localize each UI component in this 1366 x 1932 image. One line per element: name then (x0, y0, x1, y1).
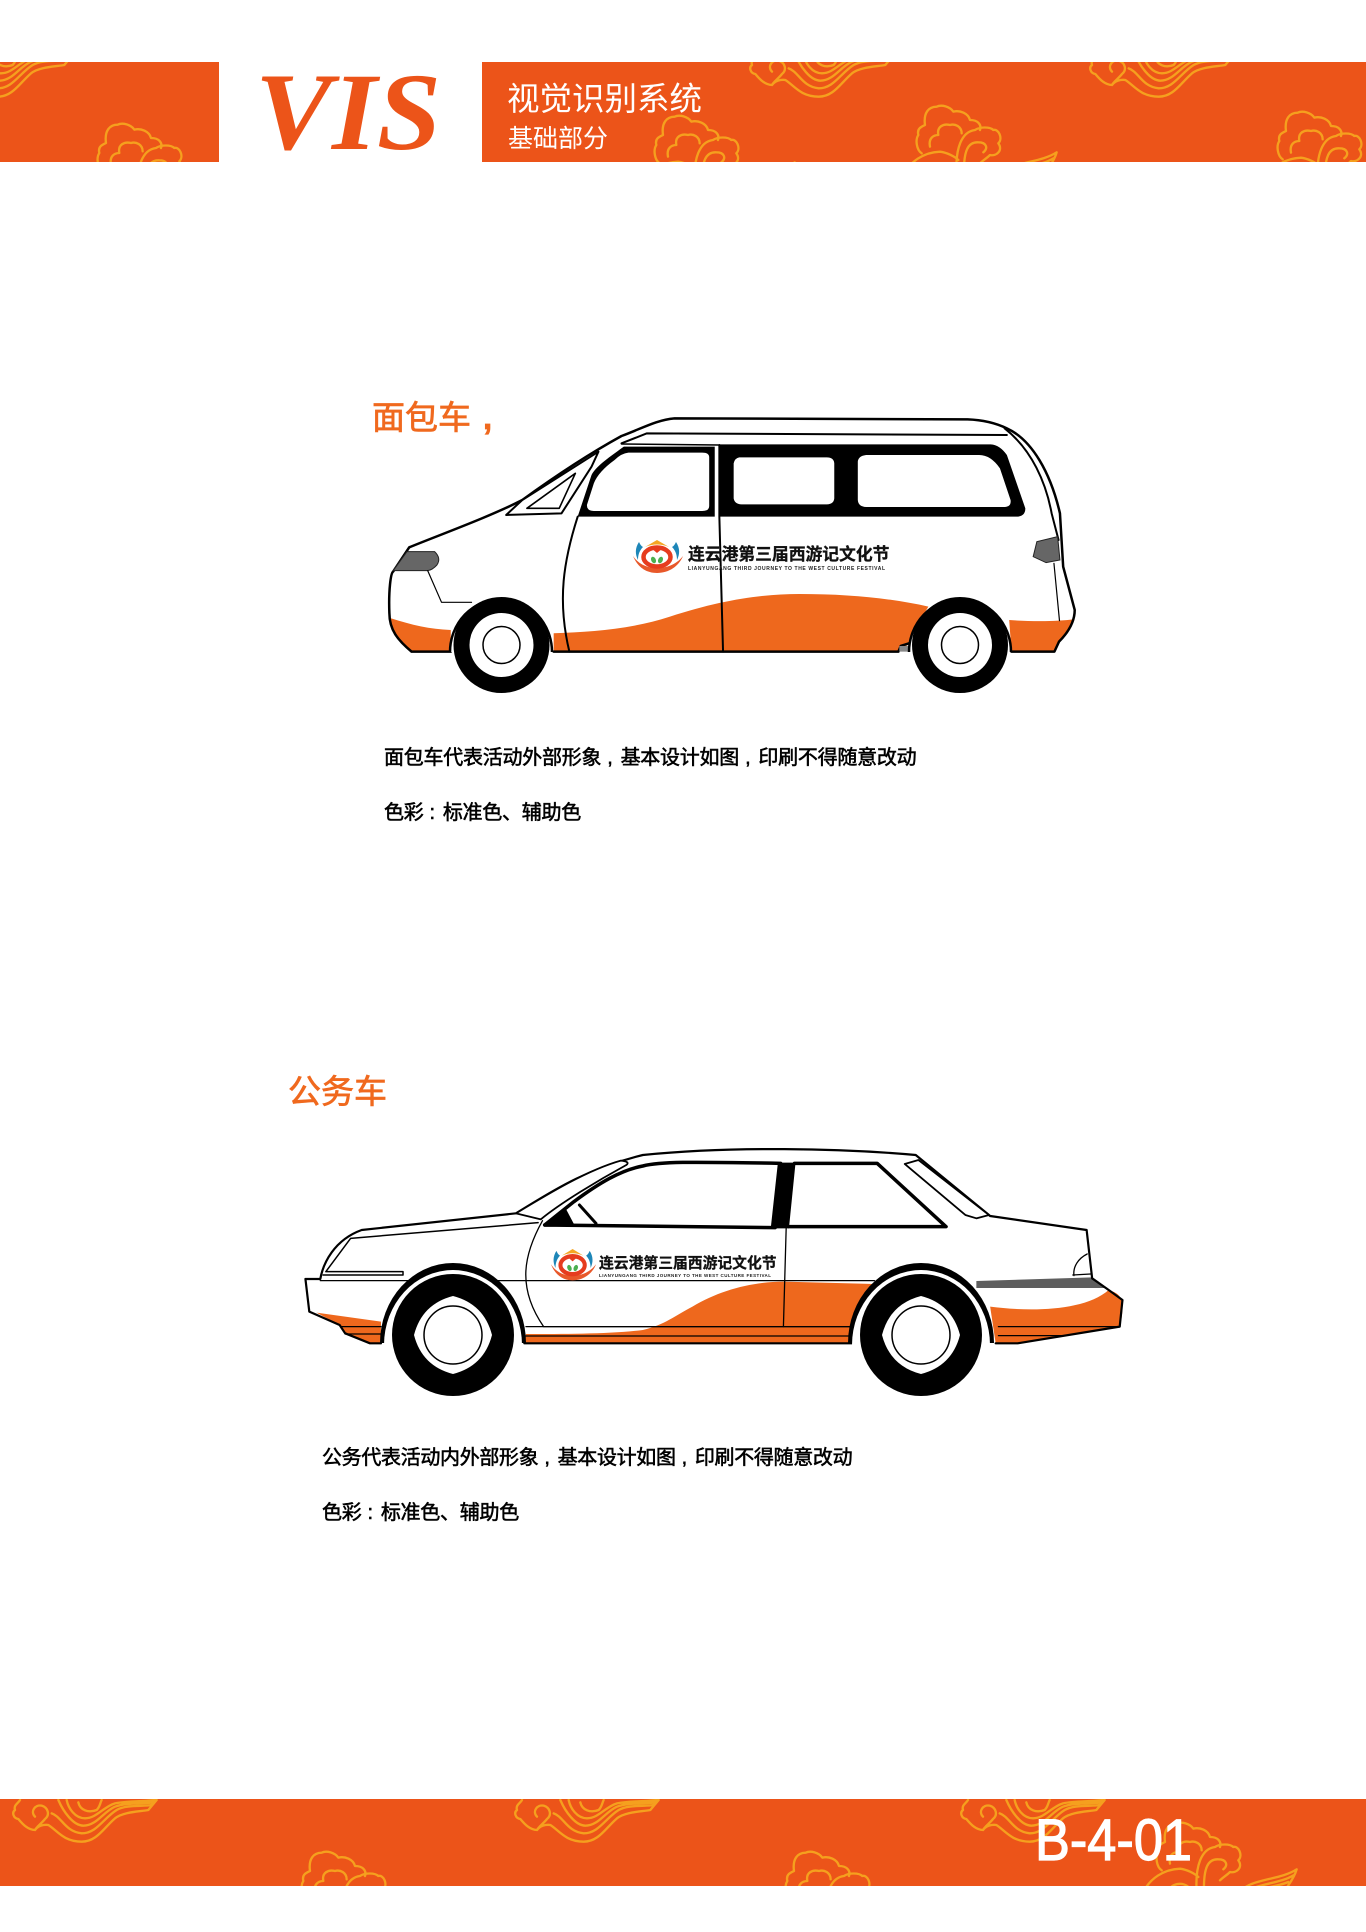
logo on sedan: LIANYUNGANG THIRD JOURNEY TO THE WEST CULTURE FESTIVAL (599, 1273, 771, 1278)
title: VIS: VIS (255, 51, 441, 173)
logo on sedan: 连云港第三届西游记文化节 (599, 1254, 777, 1272)
illustration: sedan (305, 1149, 1122, 1396)
subheading: 基础部分: 基础部分 (508, 125, 608, 153)
logo on van: 连云港第三届西游记文化节 (688, 544, 889, 564)
logo on sedan (551, 1249, 777, 1280)
heading: sedan: 公务车 (288, 1073, 387, 1110)
description: sedan line 2: 色彩 : 标准色、辅助色 (322, 1501, 519, 1524)
illustration: van (389, 418, 1075, 693)
footer band (0, 1799, 1366, 1886)
logo on van (633, 540, 889, 573)
logo on van: LIANYUNGANG THIRD JOURNEY TO THE WEST CULTURE FESTIVAL (688, 566, 885, 572)
page code: B-4-01 (1035, 1808, 1192, 1873)
description: van line 2: 色彩 : 标准色、辅助色 (384, 801, 581, 824)
heading: van: 面包车 , (372, 399, 492, 436)
description: van line 1: 面包车代表活动外部形象 , 基本设计如图 , 印刷不得随意改动 (384, 746, 916, 769)
heading: 视觉识别系统: 视觉识别系统 (507, 81, 702, 117)
description: sedan line 1: 公务代表活动内外部形象 , 基本设计如图 , 印刷不得随意改动 (322, 1446, 852, 1469)
header band (0, 62, 1366, 162)
